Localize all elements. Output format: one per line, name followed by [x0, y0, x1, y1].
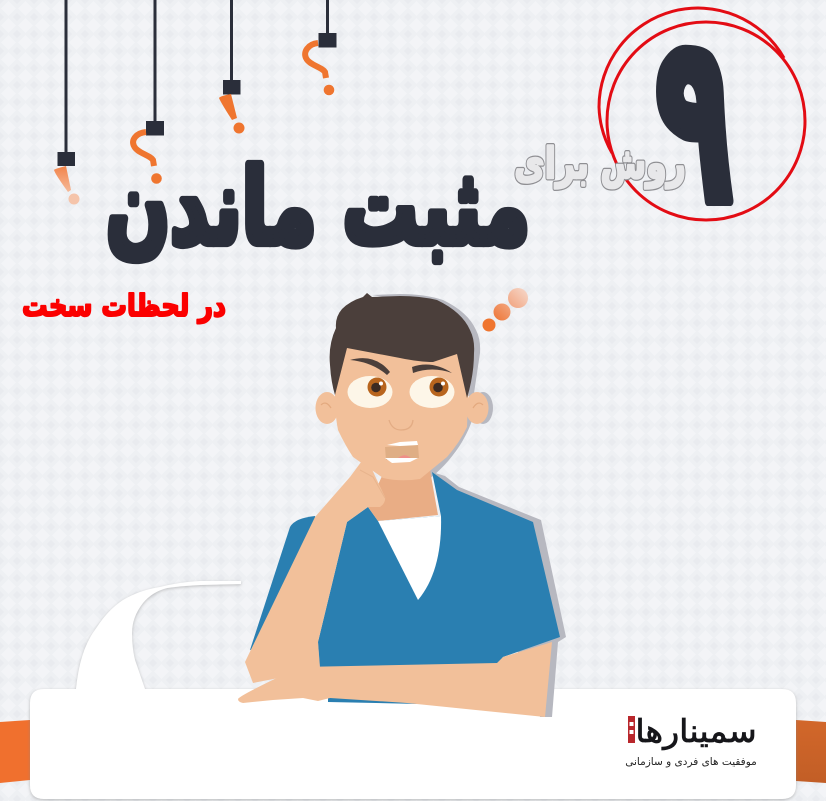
hair — [330, 293, 474, 398]
red subheading: در لحظات سخت — [22, 288, 226, 324]
thought bubble dots — [482, 288, 528, 332]
eyebrows — [350, 358, 452, 375]
orange ribbon left — [0, 720, 30, 783]
left sleeve — [250, 516, 330, 650]
subtitle: ways for: روش برای — [514, 139, 686, 189]
main title: مثبت ماندن — [106, 148, 530, 268]
hanging exclamation mark 3 — [219, 0, 244, 134]
character shadow — [318, 294, 566, 717]
eyes — [348, 376, 454, 408]
speech card with tail — [30, 581, 796, 799]
forearm on table — [238, 642, 552, 717]
logo tagline: موفقیت های فردی و سازمانی — [625, 756, 757, 768]
face — [335, 345, 470, 480]
logo: brand wordmark: سمینارها — [635, 713, 757, 750]
orange ribbon right — [796, 720, 826, 783]
neck — [368, 470, 438, 521]
nose — [389, 420, 413, 430]
ears — [316, 392, 338, 424]
torso shirt — [318, 472, 560, 668]
hanging question mark 2 — [133, 0, 164, 184]
subtitle: ways for: روش برای — [514, 139, 686, 189]
raised arm and hand — [245, 453, 385, 683]
white undershirt — [378, 516, 441, 600]
hanging question mark 4 — [305, 0, 336, 95]
red double circle — [599, 8, 805, 220]
mouth — [385, 441, 419, 463]
character: thinking man — [238, 293, 566, 717]
hanging exclamation mark 1 — [54, 0, 80, 204]
